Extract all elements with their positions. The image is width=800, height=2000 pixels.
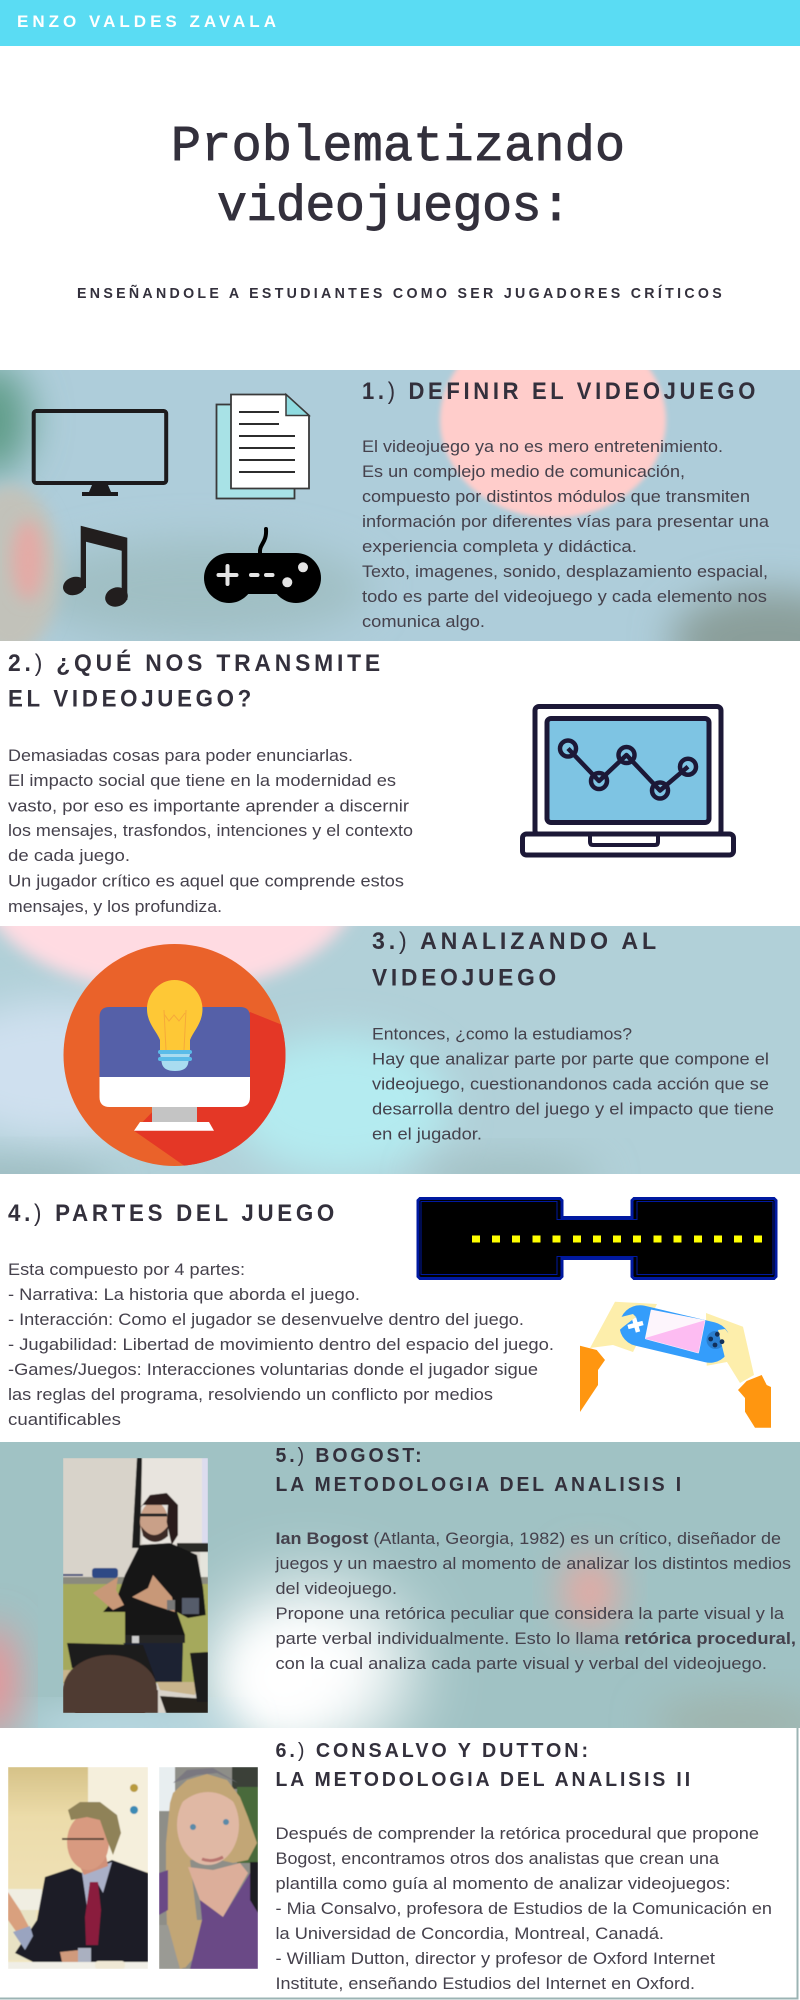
section 1 body text: información por diferentes vías para presentar una	[362, 512, 770, 531]
section 3 background	[0, 926, 800, 1174]
section 5 heading	[276, 1445, 684, 1496]
section 6 heading	[276, 1740, 693, 1791]
section 3 heading: VIDEOJUEGO	[372, 964, 560, 991]
section 6 body text	[276, 1824, 772, 1993]
section 3 heading: 3.) ANALIZANDO AL	[372, 928, 660, 955]
section 2 body text: mensajes, y los profundiza.	[8, 897, 222, 916]
section 3 heading	[372, 928, 660, 991]
section 3 body text: videojuego, cuestionandonos cada acción que se	[372, 1075, 769, 1094]
section 2 heading: 2.) ¿QUÉ NOS TRANSMITE	[8, 649, 384, 677]
section 2 body text: Demasiadas cosas para poder enunciarlas.	[8, 746, 353, 765]
section 5 body text: con la cual analiza cada parte visual y verbal del videojuego.	[276, 1654, 767, 1673]
section 4 body text: -Games/Juegos: Interacciones voluntarias donde el jugador sigue	[8, 1360, 538, 1379]
section 3 body text: en el jugador.	[372, 1125, 482, 1144]
section 5 body text: Ian Bogost (Atlanta, Georgia, 1982) es un crítico, diseñador de	[276, 1529, 781, 1548]
section 5 body text: Propone una retórica peculiar que considera la parte visual y la	[276, 1604, 785, 1623]
photo: William Dutton	[8, 1767, 148, 1969]
section 1 body text: todo es parte del videojuego y cada elemento nos	[362, 587, 767, 606]
icon: arcade maze corridor	[418, 1198, 776, 1278]
section 2 body text: de cada juego.	[8, 846, 130, 865]
section 6 body text: - William Dutton, director y profesor de Oxford Internet	[276, 1949, 715, 1968]
section 5 heading: 5.) BOGOST:	[276, 1445, 424, 1467]
section 2 body text: vasto, por eso es importante aprender a discernir	[8, 796, 409, 816]
icon: music notes	[61, 526, 130, 610]
header bar	[0, 0, 800, 46]
section 6 body text: - Mia Consalvo, profesora de Estudios de la Comunicación en	[276, 1899, 772, 1918]
panel: section 4 parts of the game	[8, 1198, 776, 1429]
subtitle: ENSEÑANDOLE A ESTUDIANTES COMO SER JUGADORES CRÍTICOS	[77, 284, 725, 302]
icon: documents	[216, 394, 309, 498]
section 6 white card with border	[0, 1728, 798, 1998]
section 2 body text: los mensajes, trasfondos, intenciones y el contexto	[8, 821, 413, 840]
section 5 heading: LA METODOLOGIA DEL ANALISIS I	[276, 1474, 684, 1496]
section 4 body text: - Interacción: Como el jugador se desenvuelve dentro del juego.	[8, 1310, 524, 1329]
icon: monitor	[34, 411, 166, 496]
section 6 body text: Bogost, encontramos otros dos analistas que crean una	[276, 1849, 720, 1868]
icon: laptop with line chart	[522, 706, 734, 855]
section 1 body text: comunica algo.	[362, 612, 485, 631]
section 1 background	[0, 370, 800, 641]
photo: Ian Bogost	[63, 1458, 208, 1725]
panel: section 6 Consalvo and Dutton	[0, 1728, 798, 1998]
panel: section 3 analyzing the videogame	[0, 926, 800, 1174]
icon: hands holding handheld console	[580, 1302, 771, 1428]
section 4 body text: - Jugabilidad: Libertad de movimiento dentro del espacio del juego.	[8, 1335, 554, 1354]
section 5 body text: juegos y un maestro al momento de analizar los distintos medios	[274, 1554, 791, 1573]
panel: section 5 Bogost	[0, 1442, 800, 1753]
section 5 background	[0, 1442, 800, 1753]
icon: monitor with light bulb	[64, 944, 290, 1176]
section 1 body text: compuesto por distintos módulos que transmiten	[362, 487, 750, 506]
author name: ENZO VALDES ZAVALA	[17, 12, 280, 31]
section 1 body text: Es un complejo medio de comunicación,	[362, 462, 685, 481]
panel: section 1 define the videogame	[0, 370, 800, 641]
section 3 body text: desarrolla dentro del juego y el impacto que tiene	[372, 1100, 774, 1118]
section 1 body text: El videojuego ya no es mero entretenimiento.	[362, 437, 723, 456]
section 3 body text: Hay que analizar parte por parte que compone el	[372, 1050, 769, 1069]
section 1 body text: Texto, imagenes, sonido, desplazamiento espacial,	[362, 562, 768, 581]
section 3 body text: Entonces, ¿como la estudiamos?	[372, 1024, 632, 1044]
section 1 body text	[362, 437, 770, 631]
section 4 body text: - Narrativa: La historia que aborda el juego.	[8, 1285, 360, 1304]
section 4 body text	[8, 1260, 554, 1429]
section 4 body text: las reglas del programa, resolviendo un conflicto por medios	[8, 1385, 493, 1404]
section 2 body text: El impacto social que tiene en la modernidad es	[8, 771, 396, 790]
section 5 body text: parte verbal individualmente. Esto lo llama retórica procedural,	[276, 1629, 796, 1648]
panel: section 2 what the videogame transmits	[8, 649, 734, 916]
section 2 body text	[8, 746, 413, 916]
section 2 heading	[8, 649, 384, 712]
icon: game controller	[204, 529, 321, 603]
section 4 body text: cuantificables	[8, 1410, 121, 1429]
section 4 heading: 4.) PARTES DEL JUEGO	[8, 1200, 338, 1227]
title: Problematizando	[171, 119, 625, 176]
section 1 heading: 1.) DEFINIR EL VIDEOJUEGO	[362, 378, 759, 405]
section 5 body text	[274, 1529, 796, 1673]
section 4 body text: Esta compuesto por 4 partes:	[8, 1260, 245, 1279]
title: videojuegos:	[217, 179, 571, 236]
section 6 body text: Institute, enseñando Estudios del Internet en Oxford.	[276, 1974, 695, 1993]
section 3 body text	[372, 1024, 774, 1144]
section 2 heading: EL VIDEOJUEGO?	[8, 686, 255, 712]
section 5 body text: del videojuego.	[276, 1579, 397, 1598]
section 6 heading: 6.) CONSALVO Y DUTTON:	[276, 1740, 591, 1762]
section 6 body text: plantilla como guía al momento de analizar videojuegos:	[276, 1874, 730, 1893]
title	[171, 119, 625, 236]
section 1 body text: experiencia completa y didáctica.	[362, 537, 637, 556]
section 6 body text: la Universidad de Concordia, Montreal, Canadá.	[276, 1924, 664, 1943]
section 6 heading: LA METODOLOGIA DEL ANALISIS II	[276, 1769, 693, 1791]
section 6 body text: Después de comprender la retórica procedural que propone	[276, 1824, 759, 1843]
section 2 body text: Un jugador crítico es aquel que comprende estos	[8, 872, 404, 890]
photo: Mia Consalvo	[159, 1767, 258, 1969]
